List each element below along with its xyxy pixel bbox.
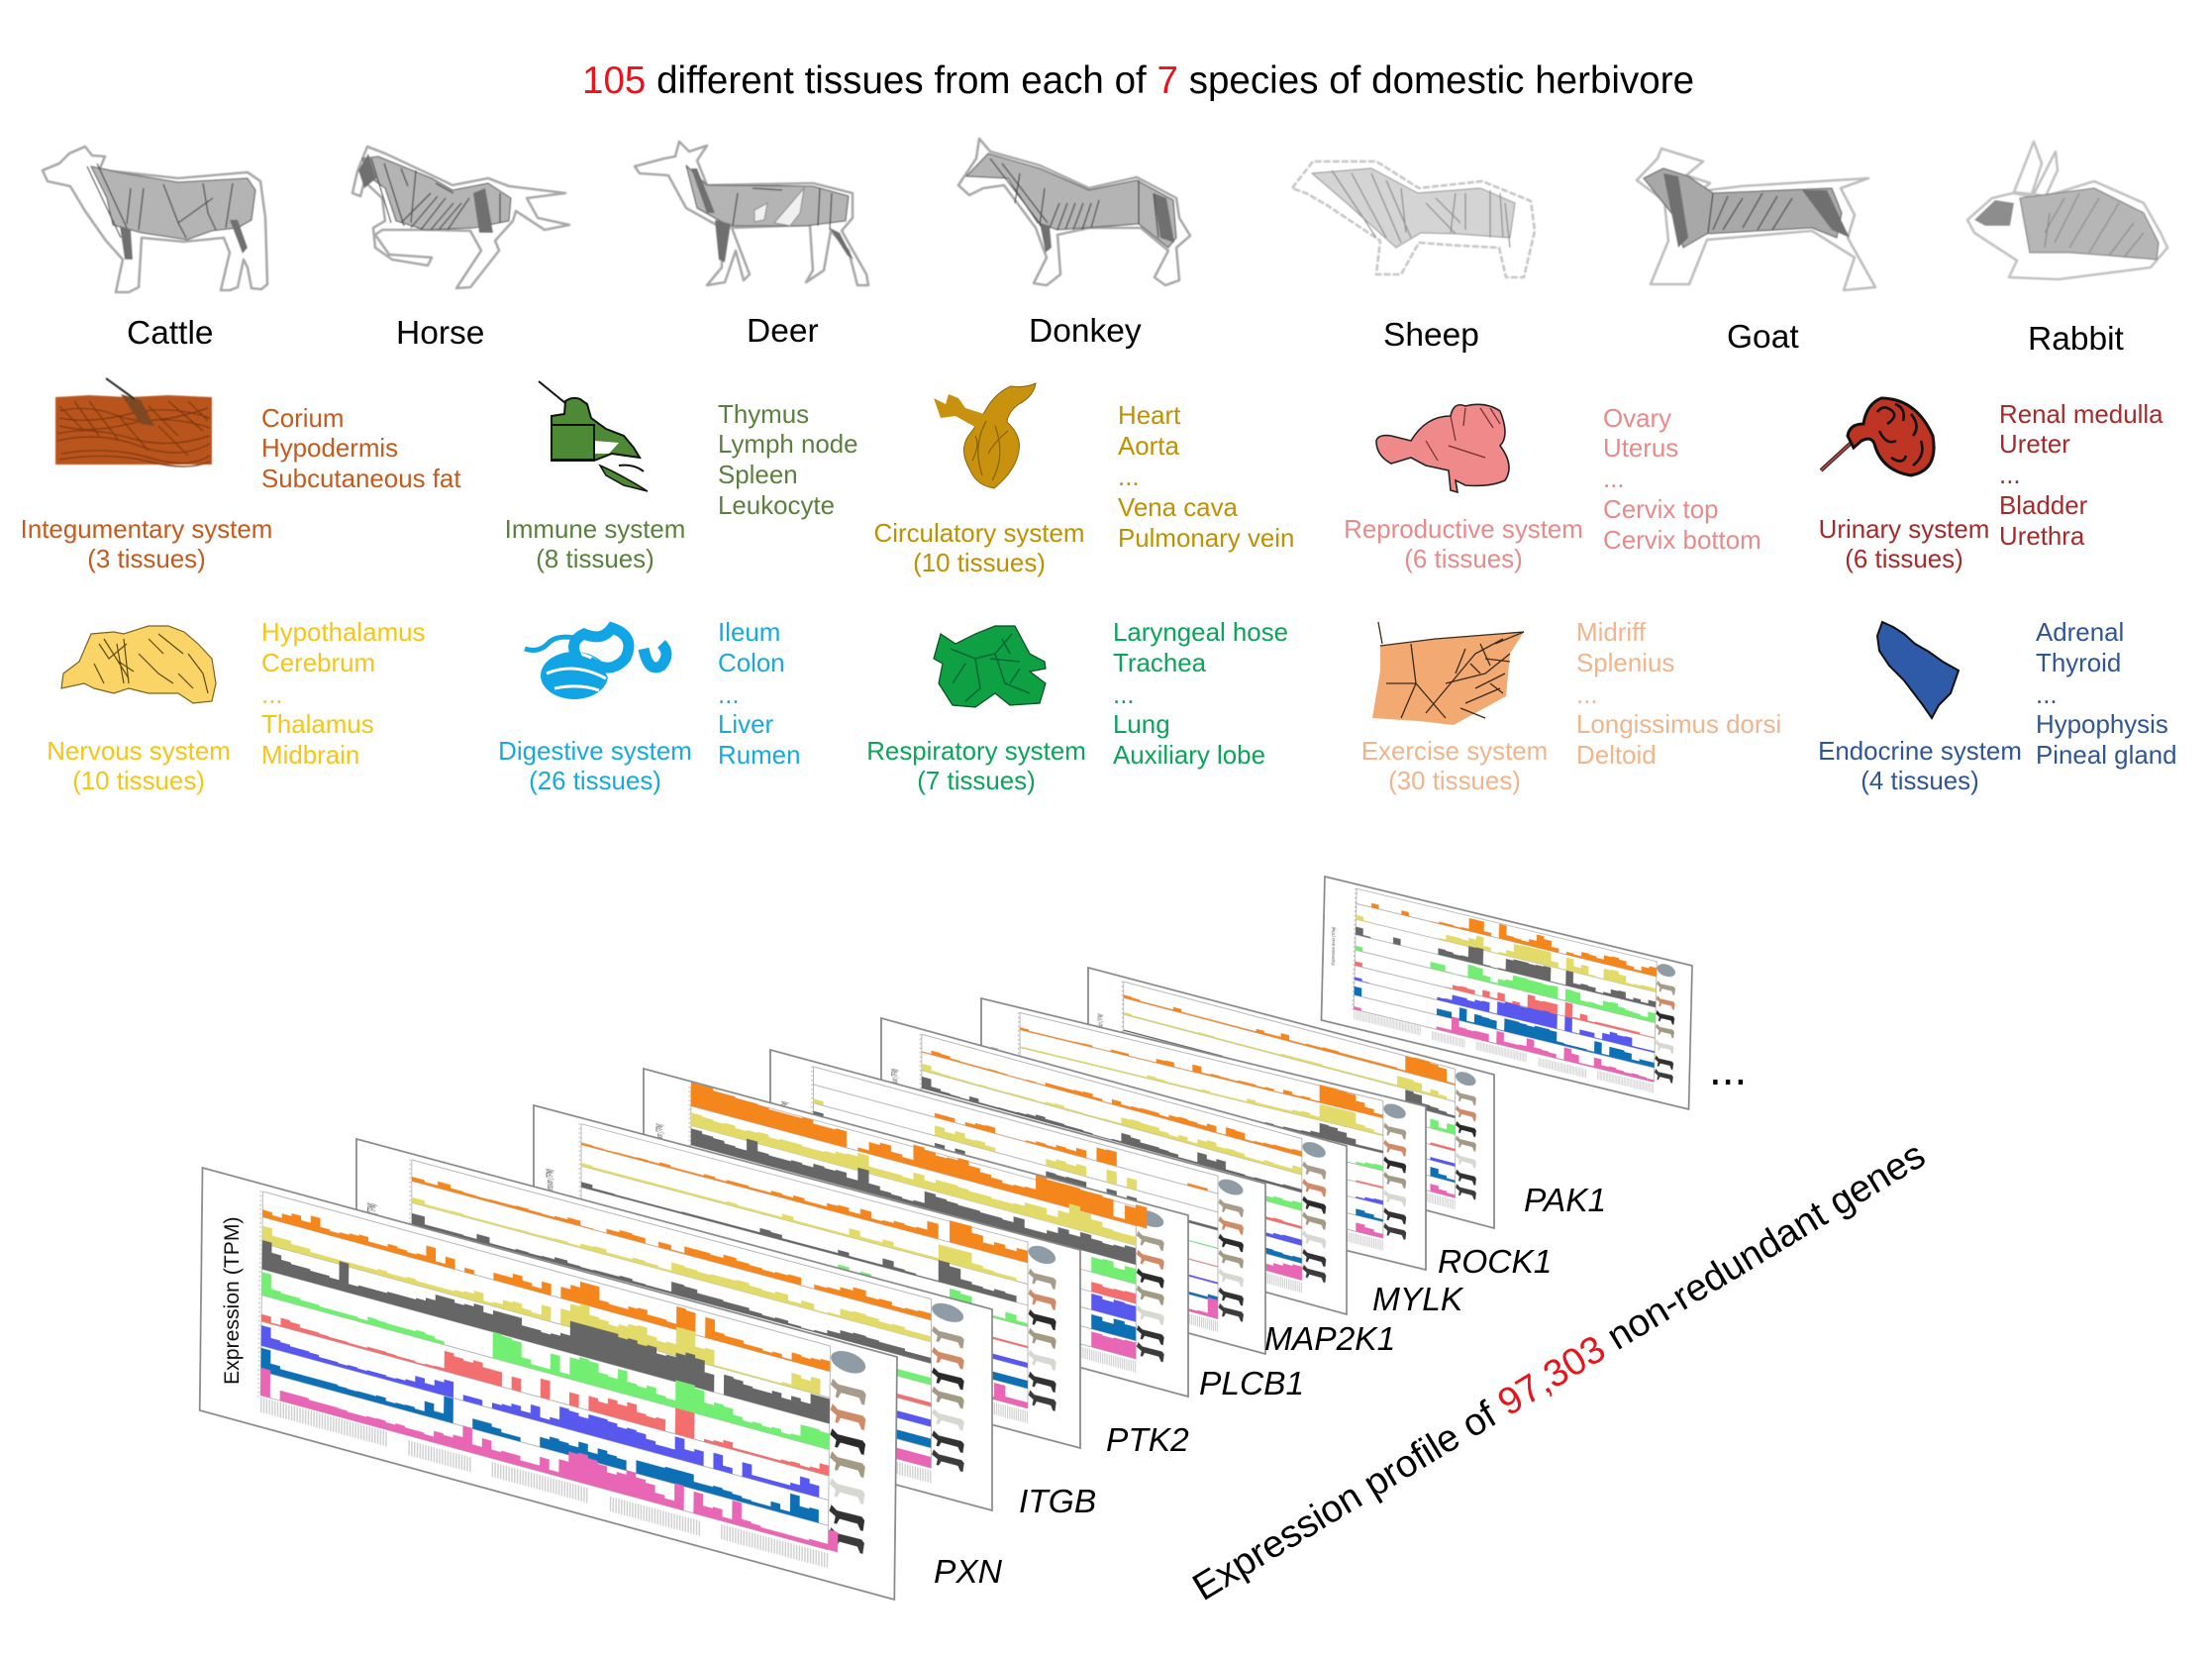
tissue list: Bladder [1999, 492, 2088, 520]
label: nervous: Nervous system [47, 738, 231, 766]
panel: respiratory system [866, 619, 1288, 795]
tissue list: Vena cava [1118, 494, 1239, 522]
y-axis label: Expression (TPM) [221, 1216, 244, 1385]
panel: species row [43, 139, 2167, 358]
label: digestive: Digestive system [498, 738, 692, 766]
panel: endocrine system [1818, 619, 2177, 795]
label: urinary: Urinary system [1819, 516, 1989, 544]
icon: lung [934, 626, 1046, 707]
label: reproductive: (6 tissues) [1404, 546, 1523, 573]
label: exercise: (30 tissues) [1388, 768, 1521, 795]
tissue list: Spleen [718, 462, 798, 489]
tissue list: Thalamus [261, 711, 374, 739]
species: cattle: Cattle [127, 315, 214, 352]
rotated caption: Expression profile of 97,303 non-redundant genes [1185, 1134, 1933, 1609]
icon: heart [934, 383, 1036, 488]
tissue list: Midbrain [261, 742, 359, 770]
species: horse: Horse [396, 315, 484, 352]
tissue list: Ileum [718, 619, 780, 647]
tissue list: Auxiliary lobe [1113, 742, 1265, 770]
tissue list: ... [1118, 464, 1140, 491]
tissue list: ... [1603, 466, 1625, 493]
gene labels: PXN [934, 1554, 1003, 1591]
tissue list: Cerebrum [261, 650, 375, 677]
panel: circulatory system [874, 383, 1294, 577]
label: respiratory: Respiratory system [866, 738, 1086, 766]
tissue list: Pineal gland [2036, 742, 2177, 770]
tissue list: Deltoid [1576, 742, 1657, 770]
title: 105 different tissues from each of 7 species of domestic herbivore [582, 59, 1694, 102]
species: deer [635, 142, 868, 350]
label: integumentary: Integumentary system [21, 516, 272, 544]
tissue list: Subcutaneous fat [261, 466, 461, 493]
chart panel: PXN [200, 1168, 897, 1600]
tissue list: Pulmonary vein [1118, 525, 1294, 553]
ellipsis: more panels: ... [1709, 1043, 1747, 1094]
panel: digestive system [498, 619, 800, 795]
label: circulatory: (10 tissues) [913, 550, 1046, 577]
label: immune: Immune system [505, 516, 685, 544]
tissue list: ... [1999, 462, 2021, 489]
species: donkey: Donkey [1029, 313, 1142, 350]
tissue list: Longissimus dorsi [1576, 711, 1781, 739]
label: integumentary: (3 tissues) [87, 546, 206, 573]
panel: integumentary system [21, 378, 461, 573]
tissue list: Midriff [1576, 619, 1646, 647]
icon: kidney [1821, 398, 1934, 475]
panel: exercise system [1361, 619, 1781, 795]
icon: thymus [539, 381, 648, 491]
chart panel: unlabelled tissue panel [644, 1069, 1188, 1397]
tissue list: ... [261, 681, 283, 709]
icon: brain [61, 626, 216, 703]
tissue list: Corium [261, 405, 344, 433]
gene labels: ROCK1 [1438, 1244, 1552, 1281]
panel: immune system [505, 381, 858, 573]
label: respiratory: (7 tissues) [917, 768, 1036, 795]
chart panel: MAP2K1: Expression (TPM) [891, 1068, 900, 1094]
chart panel: MAP2K1 [881, 1018, 1347, 1314]
tissue list: Cervix bottom [1603, 527, 1761, 555]
gene labels: PTK2 [1106, 1422, 1189, 1459]
icon: skin [55, 378, 212, 467]
tissue list: Splenius [1576, 650, 1674, 677]
chart panel: ITGB [356, 1139, 992, 1510]
chart panel: ROCK1 [1088, 968, 1494, 1228]
tissue list: Thyroid [2036, 650, 2121, 677]
tissue list: Ovary [1603, 405, 1671, 433]
chart panel: PAK1 [1321, 877, 1692, 1109]
species: deer: Deer [747, 313, 819, 350]
tissue list: ... [1113, 681, 1135, 709]
tissue list: Rumen [718, 742, 800, 770]
chart panel: PTK2 [534, 1105, 1080, 1448]
icon: adrenal gland [1877, 622, 1959, 718]
species: sheep: Sheep [1383, 317, 1479, 354]
label: digestive: (26 tissues) [529, 768, 661, 795]
gene labels: MAP2K1 [1264, 1321, 1395, 1358]
tissue list: Uterus [1603, 435, 1678, 463]
species: rabbit [1967, 142, 2167, 358]
species: horse [352, 147, 569, 352]
gene labels: ITGB [1019, 1484, 1096, 1520]
species: rabbit: Rabbit [2028, 321, 2125, 358]
gene labels: MYLK [1372, 1282, 1464, 1318]
chart panel: ROCK1: Expression (TPM) [1097, 1013, 1105, 1037]
label: nervous: (10 tissues) [72, 768, 205, 795]
tissue list: Renal medulla [1999, 401, 2163, 429]
label: reproductive: Reproductive system [1344, 516, 1583, 544]
icon: intestine [525, 628, 666, 699]
tissue list: Urethra [1999, 523, 2085, 551]
tissue list: Thymus [718, 401, 809, 429]
tissue list: Heart [1118, 402, 1180, 430]
chart panel: MYLK: Expression (TPM) [990, 1046, 999, 1072]
gene labels: PAK1 [1524, 1183, 1606, 1219]
tissue list: Trachea [1113, 650, 1207, 677]
tissue list: Adrenal [2036, 619, 2124, 647]
tissue list: Laryngeal hose [1113, 619, 1288, 647]
tissue list: Colon [718, 650, 785, 677]
chart panel: ITGB: Expression (TPM) [365, 1201, 378, 1234]
tissue list: ... [1576, 681, 1598, 709]
tissue list: Lung [1113, 711, 1170, 739]
label: endocrine: (4 tissues) [1860, 768, 1979, 795]
panel: reproductive system [1344, 404, 1761, 573]
tissue list: ... [2036, 681, 2058, 709]
chart panel: PTK2: Expression (TPM) [544, 1168, 555, 1199]
panel: urinary system [1819, 398, 2163, 573]
tissue list: Hypophysis [2036, 711, 2168, 739]
species: cattle [43, 147, 267, 352]
label: immune: (8 tissues) [536, 546, 654, 573]
species: sheep [1292, 161, 1535, 354]
label: urinary: (6 tissues) [1845, 546, 1963, 573]
species: goat: Goat [1727, 319, 1799, 356]
icon: muscle [1372, 622, 1524, 725]
species: donkey [958, 139, 1190, 350]
icon: uterus [1376, 404, 1509, 492]
tissue list: Leukocyte [718, 492, 835, 520]
label: circulatory: Circulatory system [874, 520, 1084, 548]
tissue list: Lymph node [718, 431, 858, 459]
gene labels: PLCB1 [1199, 1366, 1304, 1402]
panel: nervous system [47, 619, 426, 795]
tissue list: Liver [718, 711, 773, 739]
tissue list: Cervix top [1603, 496, 1719, 524]
label: exercise: Exercise system [1361, 738, 1548, 766]
chart panel: MYLK [981, 998, 1426, 1270]
chart panel: PLCB1 [770, 1050, 1265, 1354]
tissue list: Ureter [1999, 431, 2070, 459]
species: goat [1637, 149, 1875, 356]
chart panel: unlabelled tissue panel: Expression (TPM) [654, 1122, 665, 1151]
label: endocrine: Endocrine system [1818, 738, 2022, 766]
chart panel: PAK1: Expression level (TPM) [1330, 926, 1337, 966]
tissue list: Hypothalamus [261, 619, 426, 647]
tissue list: ... [718, 681, 740, 709]
chart panel: PLCB1: Expression (TPM) [781, 1100, 790, 1127]
tissue list: Aorta [1118, 433, 1179, 461]
gene labels [934, 1183, 1606, 1591]
tissue list: Hypodermis [261, 435, 398, 463]
